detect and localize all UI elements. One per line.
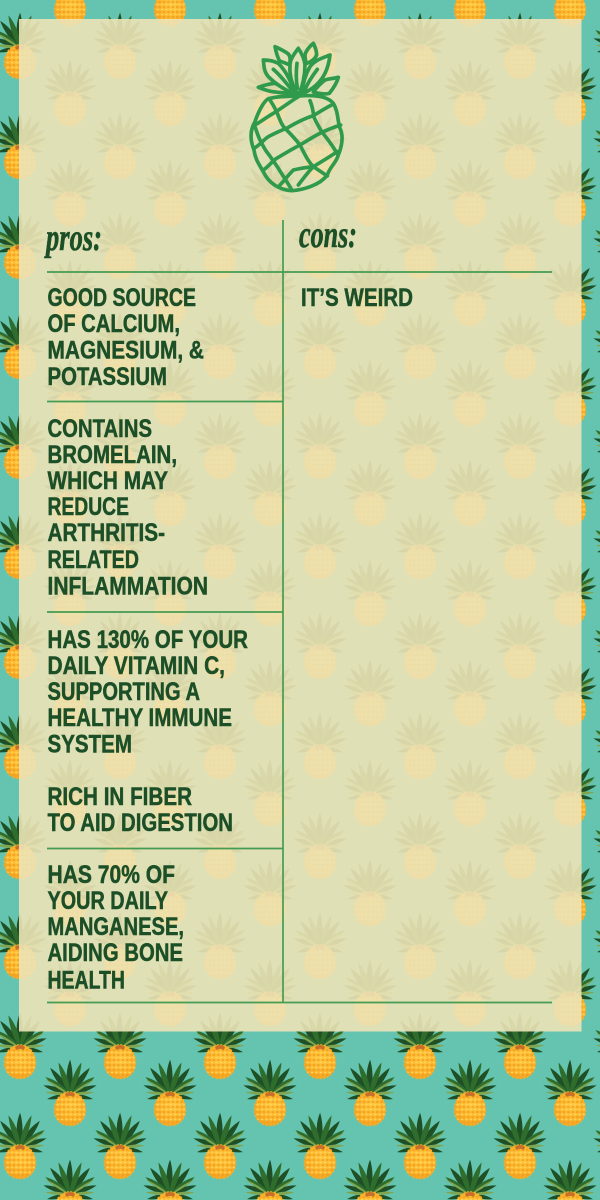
pro: minerals: MAGNESIUM, & [48,336,204,364]
pro: manganese: MANGANESE, [48,913,184,941]
pro: bromelain [48,415,208,600]
pro: vitamin C: HAS 130% OF YOUR [48,626,248,654]
con: it's weird: IT’S WEIRD [301,284,413,312]
pro: manganese [48,861,184,994]
pro: minerals [48,284,204,391]
pro: fiber: RICH IN FIBER [48,783,192,811]
pro: vitamin C: HEALTHY IMMUNE [48,704,232,732]
pro: bromelain: WHICH MAY [48,467,168,495]
pro: bromelain: BROMELAIN, [48,441,177,469]
pro: bromelain: ARTHRITIS- [48,519,165,547]
pro: manganese: AIDING BONE [48,939,183,967]
pro: manganese: YOUR DAILY [48,887,168,915]
pro: manganese: HAS 70% OF [48,861,175,889]
panel: translucent cream card [19,19,582,1032]
pro: bromelain: CONTAINS [48,415,152,443]
pro: vitamin C [48,626,248,758]
pro: bromelain: RELATED [48,546,139,574]
heading: cons: cons: [299,214,357,256]
pro: vitamin C: SYSTEM [48,730,132,758]
pro: minerals: GOOD SOURCE [48,284,196,312]
pro: vitamin C: DAILY VITAMIN C, [48,652,225,680]
pro: bromelain: INFLAMMATION [48,572,208,600]
pro: minerals: POTASSIUM [48,363,167,391]
pro: fiber [48,783,233,837]
pro: minerals: OF CALCIUM, [48,310,180,338]
heading: pros: pros: [44,217,102,259]
divider lines of the table [47,220,552,1002]
pro: bromelain: REDUCE [48,493,129,521]
pro: fiber: TO AID DIGESTION [48,809,233,837]
icon: pineapple outline [251,43,342,191]
pro: manganese: HEALTH [48,966,125,994]
pro: vitamin C: SUPPORTING A [48,678,200,706]
